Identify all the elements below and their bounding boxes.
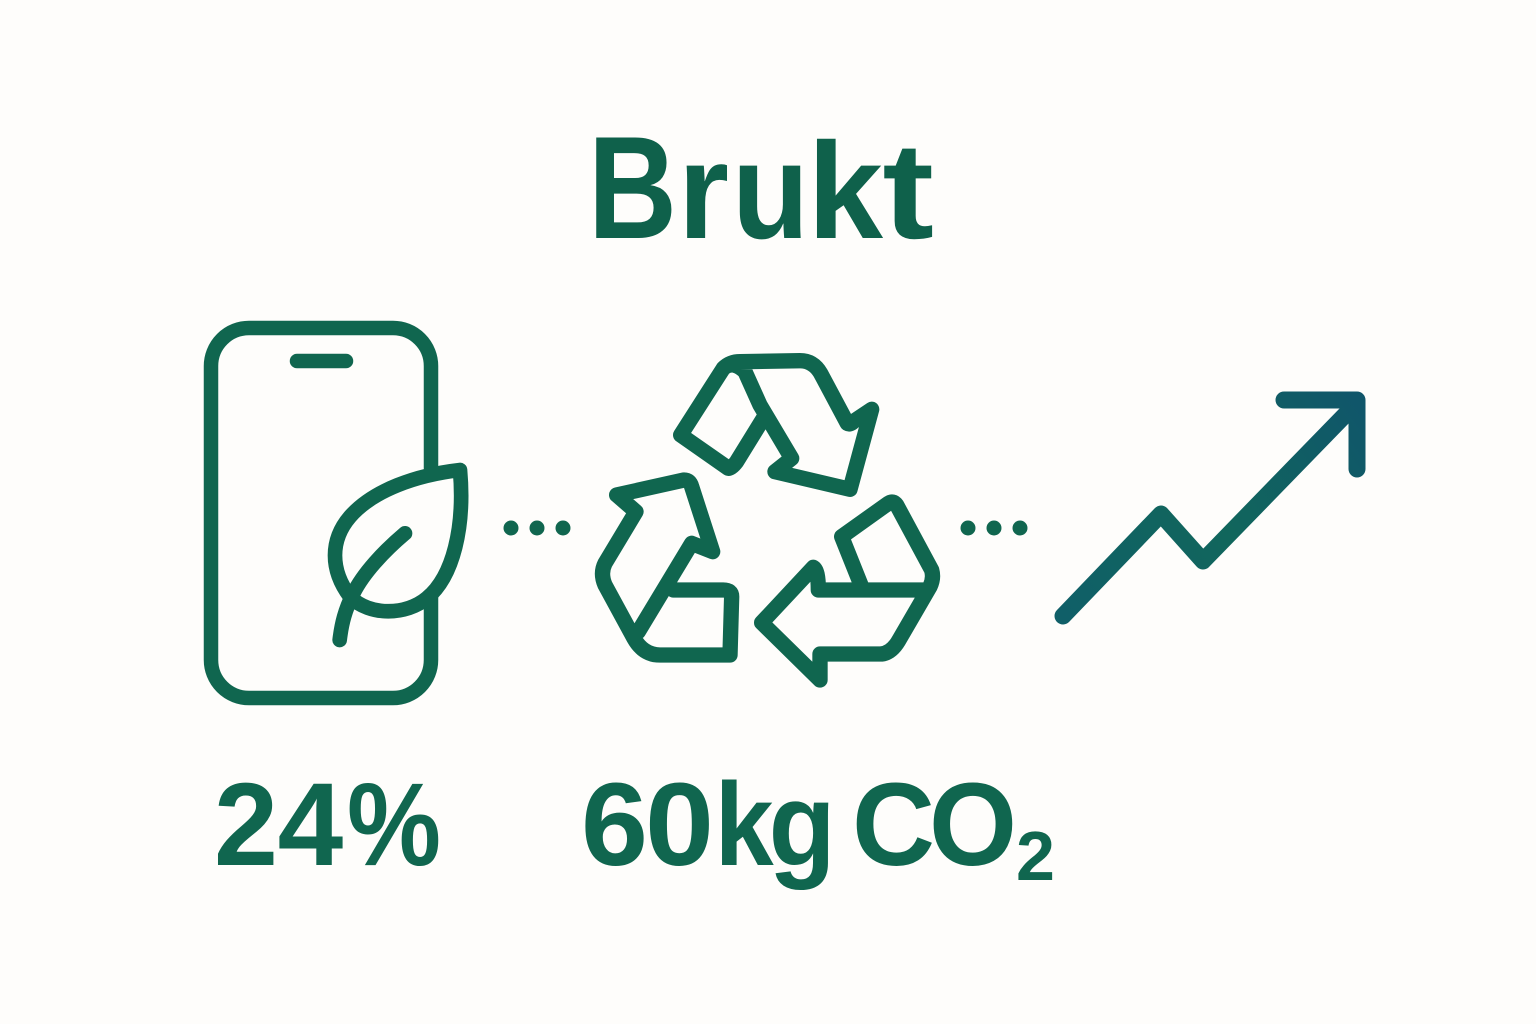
title: t <box>882 115 934 268</box>
statistic: 24%: 4 <box>278 759 343 891</box>
phone body <box>211 328 431 698</box>
statistic: 60kg CO2: k <box>715 759 774 891</box>
icon: phone with leaf <box>211 328 461 698</box>
statistic: 60kg CO2: 0 <box>645 759 714 891</box>
statistic: 24%: 2 <box>214 759 278 891</box>
phone speaker <box>297 354 346 368</box>
statistic: 60kg CO2: 2 <box>1016 817 1055 895</box>
statistic: 60kg CO2: O <box>929 759 1017 891</box>
top arrow <box>681 361 872 489</box>
right arrow <box>762 502 933 680</box>
statistic: 24%: % <box>347 759 441 891</box>
icon: recycling symbol <box>602 361 933 680</box>
title: r <box>678 115 729 268</box>
title <box>588 106 934 269</box>
title: k <box>808 115 884 268</box>
connector dots right <box>960 520 1028 536</box>
statistic: 60kg CO2 <box>581 759 1055 895</box>
statistic: 60kg CO2: 6 <box>581 759 648 891</box>
connector dots left <box>504 520 570 536</box>
leaf <box>335 470 461 640</box>
title: u <box>732 115 809 268</box>
icon: rising arrow <box>1063 400 1357 616</box>
left arrow <box>602 480 732 655</box>
statistic: 60kg CO2: g <box>769 759 836 891</box>
statistic: 24% <box>214 759 441 891</box>
statistic: 60kg CO2: C <box>852 759 935 891</box>
title: B <box>588 106 677 269</box>
